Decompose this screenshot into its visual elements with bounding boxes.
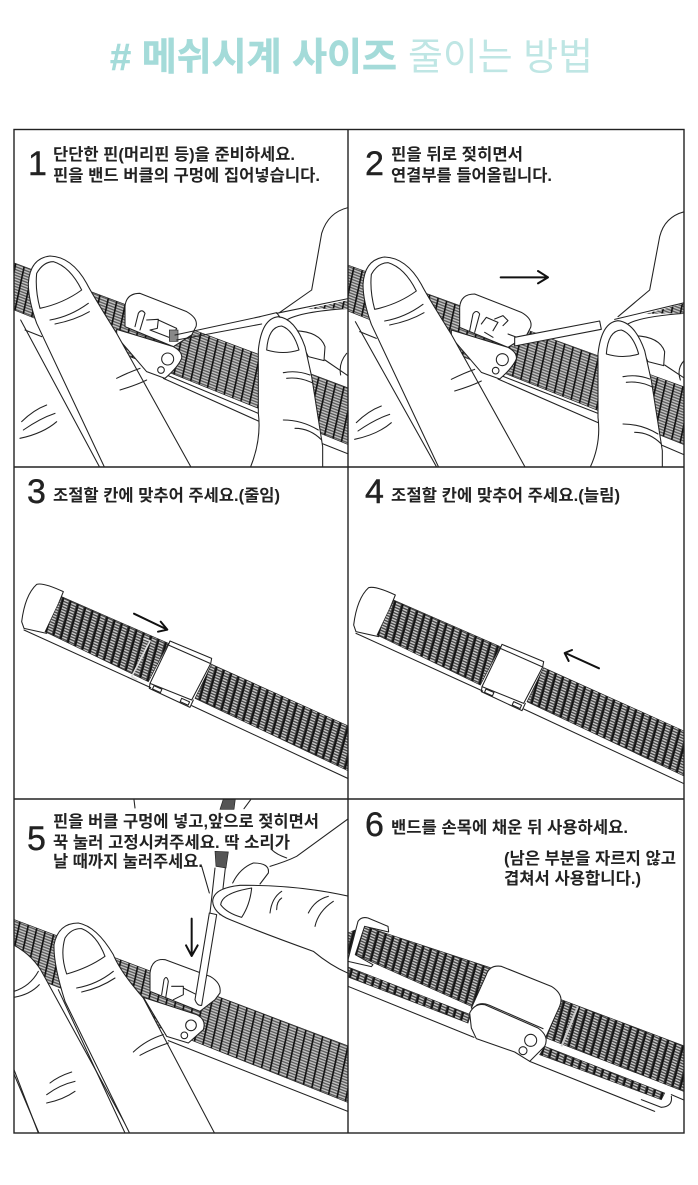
step number 2: 2 bbox=[365, 145, 384, 183]
panel: step 4 bbox=[354, 473, 685, 784]
instruction text 5 bbox=[53, 812, 319, 871]
instruction text 1: 단단한 핀(머리핀 등)을 준비하세요. bbox=[53, 145, 295, 164]
instruction text 4: 조절할 칸에 맞추어 주세요.(늘림) bbox=[391, 486, 620, 505]
instruction text 6: 겹쳐서 사용합니다.) bbox=[504, 869, 641, 888]
panel: step 2 bbox=[341, 145, 697, 469]
panel: step 5 bbox=[10, 799, 353, 1134]
instruction text 6: (남은 부분을 자르지 않고 bbox=[504, 849, 676, 868]
arrow: right-down bbox=[134, 614, 167, 632]
step number 6: 6 bbox=[365, 806, 384, 844]
arrow: right bbox=[501, 271, 548, 283]
step number 3: 3 bbox=[27, 473, 46, 511]
illustration: pressing the pin bbox=[14, 800, 348, 1132]
illustration: band slid to lengthen bbox=[353, 586, 684, 784]
title: 줄이는 방법 bbox=[408, 37, 593, 79]
arrow: down bbox=[186, 919, 198, 956]
illustration: finished band on wrist bbox=[348, 917, 684, 1112]
panel: step 1 bbox=[10, 145, 349, 468]
illustration: band slid to shorten bbox=[21, 584, 348, 779]
illustration: pin tilted back bbox=[348, 212, 684, 466]
instruction text 2 bbox=[391, 145, 552, 185]
title bbox=[110, 37, 593, 79]
title: # 메쉬시계 사이즈 bbox=[110, 37, 397, 79]
instruction text 6 bbox=[391, 818, 676, 888]
arrow: left-up bbox=[565, 650, 599, 668]
illustration: pin inserted in buckle bbox=[14, 207, 348, 466]
instruction text 5: 핀을 버클 구멍에 넣고,앞으로 젖히면서 bbox=[53, 812, 319, 831]
instruction text 2: 핀을 뒤로 젖히면서 bbox=[391, 145, 523, 164]
instruction text 3: 조절할 칸에 맞추어 주세요.(줄임) bbox=[53, 486, 280, 505]
instruction text 5: 날 때까지 눌러주세요. bbox=[53, 852, 203, 871]
instruction text 2: 연결부를 들어올립니다. bbox=[391, 166, 552, 185]
step number 5: 5 bbox=[27, 820, 46, 858]
step number 4: 4 bbox=[365, 473, 384, 511]
instruction text 6: 밴드를 손목에 채운 뒤 사용하세요. bbox=[391, 818, 628, 837]
instruction text 1: 핀을 밴드 버클의 구멍에 집어넣습니다. bbox=[53, 166, 320, 185]
instruction text 5: 꾹 눌러 고정시켜주세요. 딱 소리가 bbox=[53, 833, 290, 852]
instruction text 1 bbox=[53, 145, 320, 185]
step number 1: 1 bbox=[28, 145, 47, 183]
panel: step 6 bbox=[346, 806, 685, 1111]
panel: step 3 bbox=[22, 473, 353, 781]
